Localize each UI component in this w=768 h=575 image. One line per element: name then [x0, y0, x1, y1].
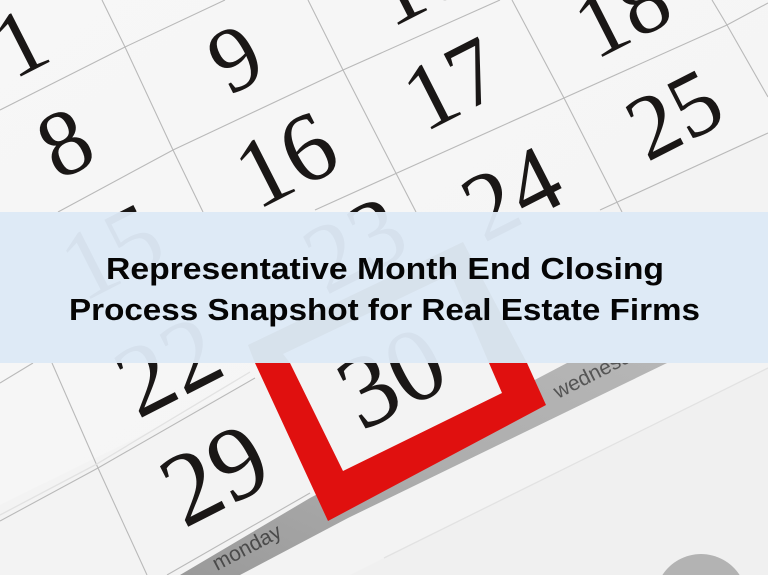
date numbers: 30 [319, 303, 464, 452]
date numbers: 29 [142, 400, 287, 549]
date numbers: 16 [218, 90, 354, 230]
title [69, 251, 700, 327]
date numbers: 24 [445, 123, 579, 262]
date numbers: 8 [20, 86, 110, 200]
monday label: monday [209, 520, 286, 575]
title: Process Snapshot for Real Estate Firms [69, 292, 700, 327]
title banner [0, 212, 768, 363]
date numbers: 15 [44, 182, 180, 322]
red date frame [255, 363, 546, 521]
date numbers: 25 [610, 48, 738, 180]
date numbers: 23 [287, 175, 423, 315]
title: Representative Month End Closing [106, 251, 664, 286]
date numbers: 22 [97, 293, 239, 440]
date numbers: 17 [387, 16, 517, 152]
date numbers: 9 [191, 2, 279, 114]
gray circle [662, 554, 740, 575]
weekday strip [180, 363, 667, 575]
faint frame behind banner [248, 242, 527, 363]
wednesday label: wednesday [549, 335, 655, 404]
